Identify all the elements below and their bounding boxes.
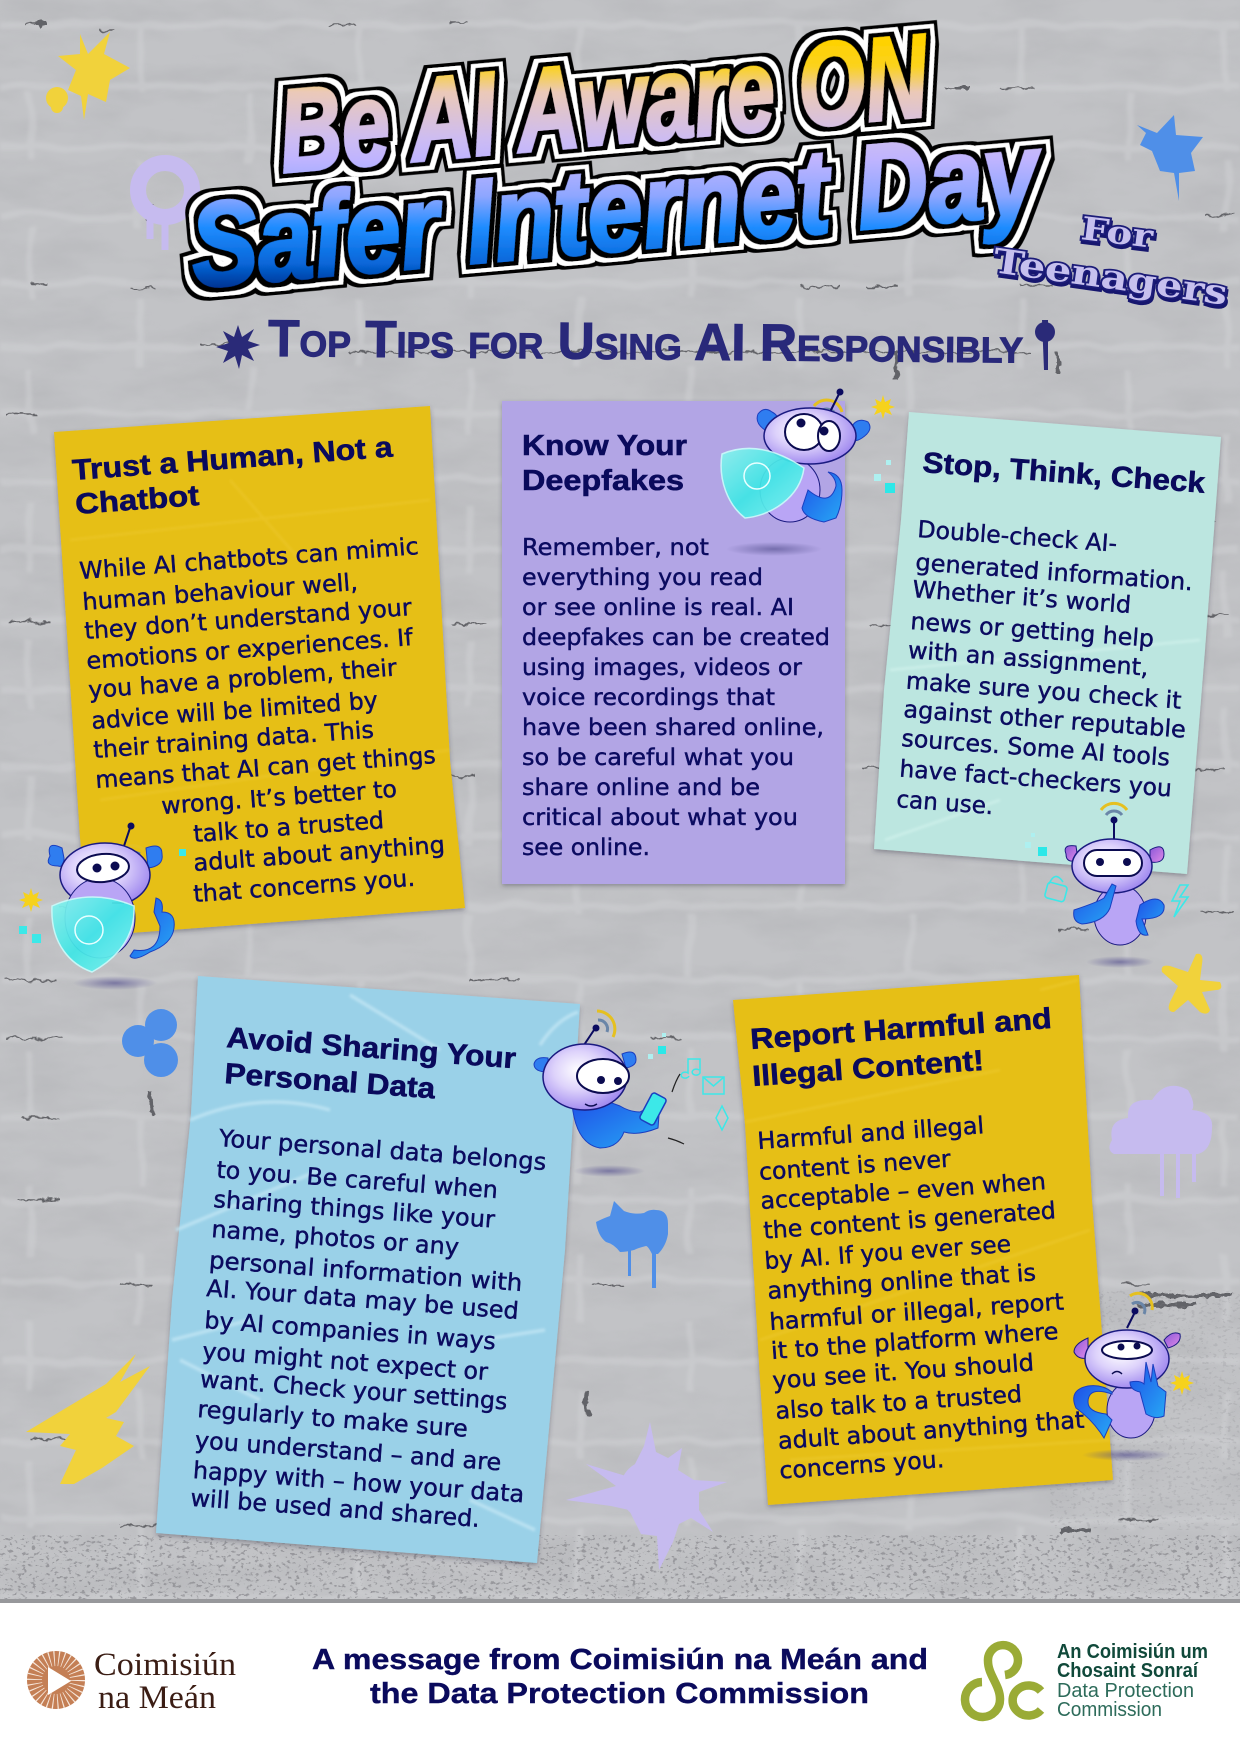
lavender splat	[566, 1422, 727, 1570]
body text	[756, 1111, 1085, 1485]
body text: Remember, not	[522, 533, 709, 561]
logo wordmark: An Coimisiún um	[1057, 1641, 1208, 1663]
heading: Report Harmful and	[749, 1003, 1053, 1056]
body text: human behaviour well,	[81, 568, 359, 616]
body text: have fact-checkers you	[899, 755, 1173, 802]
heading: Illegal Content!	[751, 1045, 985, 1093]
body text: wrong. It’s better to	[160, 775, 398, 820]
heading	[522, 430, 687, 497]
body text: voice recordings that	[522, 683, 775, 711]
body text: talk to a trusted	[192, 806, 385, 848]
subtitle splat right	[1035, 320, 1055, 370]
logo: Data Protection Commission	[965, 1641, 1208, 1721]
body text: harmful or illegal, report	[768, 1287, 1065, 1336]
logo icon	[965, 1645, 1041, 1717]
body text	[190, 1124, 547, 1533]
logo icon	[27, 1651, 85, 1709]
body text: advice will be limited by	[90, 686, 379, 735]
body text: deepfakes can be created	[522, 623, 830, 651]
panel: avoid sharing	[156, 976, 580, 1563]
lavender ring splat	[138, 163, 192, 250]
heading: Trust a Human, Not a	[71, 431, 395, 487]
body text: news or getting help	[910, 607, 1155, 653]
footer message	[312, 1644, 928, 1710]
body text: their training data. This	[92, 715, 375, 764]
body text: or see online is real. AI	[522, 593, 794, 621]
panel: stop think check	[874, 412, 1221, 874]
body text: concerns you.	[778, 1445, 945, 1485]
body text: content is never	[758, 1145, 952, 1186]
heading: Deepfakes	[522, 465, 684, 497]
yellow star splat right	[1162, 954, 1221, 1014]
logo wordmark: Chosaint Sonraí	[1057, 1660, 1199, 1682]
body text: so be careful what you	[522, 743, 794, 771]
body text: can use.	[896, 785, 994, 820]
footer message: the Data Protection Commission	[370, 1678, 869, 1710]
mascot: shield thumbs up	[19, 822, 186, 990]
heading: Personal Data	[223, 1058, 437, 1106]
heading: Stop, Think, Check	[921, 447, 1207, 500]
mascot: phone	[534, 1011, 728, 1177]
body text: you have a problem, their	[87, 653, 398, 704]
panel: report harmful	[733, 975, 1113, 1505]
title	[176, 1, 1048, 313]
for teenagers label: Teenagers	[991, 241, 1230, 314]
body text: with an assignment,	[907, 636, 1149, 682]
logo wordmark: Commission	[1057, 1699, 1162, 1721]
body text: Double-check AI-	[917, 515, 1118, 558]
logo wordmark: na Meán	[98, 1680, 216, 1716]
body text: using images, videos or	[522, 653, 802, 681]
logo wordmark	[94, 1647, 236, 1716]
body text: sources. Some AI tools	[901, 724, 1171, 772]
body text: adult about anything that	[777, 1406, 1085, 1455]
subtitle: Top Tips for Using AI Responsibly	[268, 310, 1023, 375]
blue splat top right	[1137, 115, 1203, 201]
logo: Coimisiún na Meán	[27, 1647, 236, 1716]
body text: against other reputable	[903, 695, 1187, 744]
body text: to you. Be careful when	[216, 1156, 499, 1204]
heading	[749, 1003, 1053, 1093]
body text: the content is generated	[762, 1196, 1057, 1245]
yellow scribble splat	[26, 1354, 150, 1484]
panel: know your deepfakes	[502, 401, 845, 884]
body text: have been shared online,	[522, 713, 824, 741]
lavender cloud drip	[1109, 1086, 1212, 1198]
yellow star splat top left	[46, 32, 130, 120]
body text: anything online that is	[766, 1258, 1037, 1305]
body text: they don’t understand your	[83, 593, 413, 645]
body text: While AI chatbots can mimic	[78, 532, 420, 585]
heading: Know Your	[522, 430, 687, 462]
blue drip splat	[596, 1201, 668, 1288]
logo wordmark: Coimisiún	[94, 1647, 236, 1683]
mascot: stop hand	[1074, 1293, 1194, 1461]
body text: you understand – and are	[194, 1426, 502, 1476]
body text: sharing things like your	[213, 1185, 496, 1234]
for teenagers label	[991, 209, 1230, 314]
mascot: shield looking up	[721, 388, 895, 556]
for teenagers label: For	[1079, 209, 1156, 256]
body text	[896, 515, 1194, 820]
title: Safer Internet Day	[185, 105, 1048, 313]
body text: AI. Your data may be used	[206, 1274, 520, 1325]
body text: Whether it’s world	[912, 575, 1132, 619]
body text: emotions or experiences. If	[85, 623, 414, 675]
body text	[522, 533, 830, 861]
panel: trust a human	[54, 406, 465, 936]
logo wordmark	[1057, 1641, 1208, 1721]
body text: it to the platform where	[770, 1317, 1059, 1365]
body text: critical about what you	[522, 803, 798, 831]
body text: make sure you check it	[905, 667, 1182, 715]
body text: you see it. You should	[771, 1348, 1035, 1395]
body text: see online.	[522, 833, 650, 861]
heading: Avoid Sharing Your	[225, 1022, 517, 1075]
body text: everything you read	[522, 563, 763, 591]
subtitle splat left	[216, 325, 260, 369]
body text: acceptable – even when	[759, 1167, 1047, 1215]
body text: name, photos or any	[211, 1215, 460, 1261]
body text: share online and be	[522, 773, 760, 801]
body text: by AI. If you ever see	[763, 1230, 1012, 1275]
body text: that concerns you.	[192, 864, 416, 908]
body text: means that AI can get things	[94, 741, 437, 794]
body text: generated information.	[915, 548, 1194, 596]
heading: Chatbot	[74, 480, 201, 521]
heading	[223, 1022, 517, 1106]
body text: personal information with	[208, 1246, 523, 1297]
mascot: finger on lips	[1025, 803, 1188, 968]
body text: adult about anything	[192, 831, 446, 877]
body text: Your personal data belongs	[217, 1124, 547, 1176]
body text: regularly to make sure	[197, 1395, 469, 1443]
footer message: A message from Coimisiún na Meán and	[312, 1644, 928, 1676]
body text: Harmful and illegal	[756, 1111, 985, 1155]
body text: also talk to a trusted	[774, 1380, 1023, 1425]
footer band	[0, 1599, 1240, 1754]
body text	[78, 532, 446, 908]
blue dots splat	[122, 1009, 178, 1077]
body text: want. Check your settings	[199, 1365, 508, 1416]
heading	[71, 431, 395, 521]
body text: by AI companies in ways	[204, 1306, 497, 1355]
body text: happy with – how your data	[192, 1456, 525, 1508]
logo wordmark: Data Protection	[1057, 1680, 1194, 1702]
body text: you might not expect or	[202, 1337, 489, 1386]
body text: will be used and shared.	[190, 1484, 481, 1533]
